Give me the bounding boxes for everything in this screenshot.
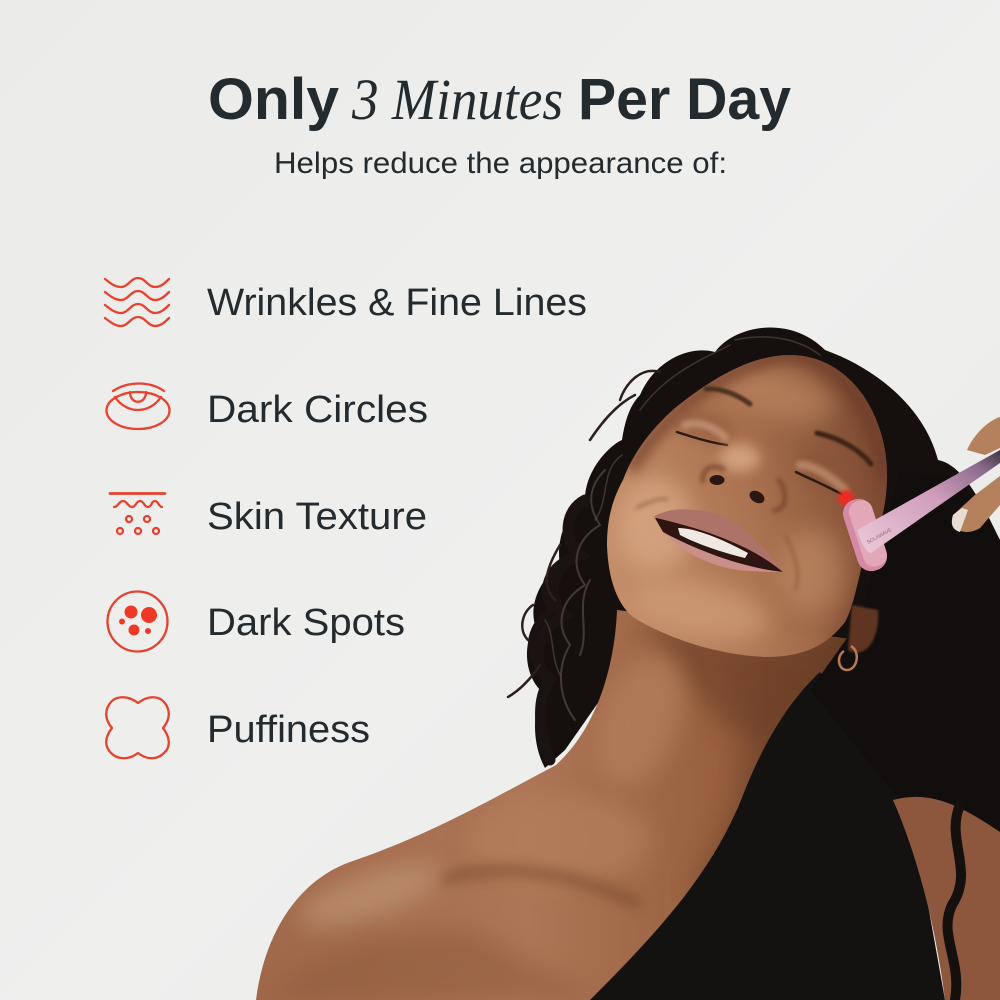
photo: woman using red light wand bbox=[250, 328, 1000, 1000]
eye socket shadow bbox=[679, 408, 734, 444]
red light glow bbox=[838, 490, 854, 506]
curl highlights bbox=[561, 470, 605, 720]
lower chest shade bbox=[298, 932, 564, 1000]
nose bbox=[703, 444, 785, 510]
smile crease bbox=[636, 499, 798, 590]
right hair bbox=[810, 470, 1000, 835]
icon: wrinkles bbox=[105, 278, 169, 326]
subtitle: Helps reduce the appearance of: bbox=[274, 147, 727, 180]
wand bbox=[839, 450, 1000, 575]
lower lip bbox=[662, 530, 783, 572]
title bbox=[208, 67, 791, 132]
shoulder highlight bbox=[299, 859, 442, 932]
title: Only bbox=[208, 67, 339, 132]
hanging curl on arm bbox=[948, 805, 961, 1000]
collarbone shading bbox=[440, 871, 640, 905]
right cheek tone bbox=[778, 528, 842, 612]
neck lit area bbox=[603, 650, 688, 781]
label: dark spots: Dark Spots bbox=[207, 602, 405, 644]
jaw shadow bbox=[830, 480, 885, 645]
left curls bbox=[508, 337, 820, 760]
label: skin texture: Skin Texture bbox=[207, 496, 427, 538]
cheek highlight bbox=[617, 477, 693, 573]
title: 3 Minutes bbox=[351, 67, 563, 132]
hand bbox=[952, 417, 1000, 532]
ear bbox=[848, 605, 878, 653]
title: Per Day bbox=[578, 67, 791, 132]
wand head bbox=[839, 495, 891, 575]
eye socket shadow right bbox=[788, 440, 862, 500]
forehead shadow at hairline bbox=[630, 355, 885, 480]
upper lip bbox=[653, 509, 783, 572]
wand handle bbox=[857, 450, 1000, 553]
black dress bbox=[590, 672, 945, 1000]
chest tone bbox=[564, 807, 646, 873]
body: neck, chest and shoulder bbox=[250, 600, 870, 1000]
arm bbox=[893, 797, 1000, 1000]
chin highlight bbox=[640, 578, 770, 645]
mouth interior bbox=[655, 518, 783, 572]
neck shadow under jaw bbox=[644, 626, 806, 734]
icon: skin texture bbox=[110, 494, 165, 534]
icon: puffiness bbox=[106, 697, 169, 758]
label: wrinkles: Wrinkles & Fine Lines bbox=[207, 282, 587, 324]
label: puffiness: Puffiness bbox=[207, 709, 370, 751]
label: dark circles: Dark Circles bbox=[207, 389, 428, 431]
teeth bbox=[678, 528, 748, 558]
face bbox=[600, 350, 895, 665]
wand head face bbox=[846, 497, 890, 569]
forehead highlight bbox=[734, 367, 838, 428]
back hair mass bbox=[527, 328, 1000, 840]
neck right shade bbox=[692, 742, 764, 884]
earring bbox=[839, 646, 857, 670]
left eye and brow bbox=[677, 389, 750, 445]
smile bbox=[653, 509, 783, 572]
icon: dark spots bbox=[108, 592, 168, 652]
list of benefits bbox=[105, 278, 587, 758]
wand text: SOLAWAVE bbox=[866, 527, 893, 546]
right eye and brow bbox=[796, 433, 871, 497]
icon: dark circles bbox=[106, 384, 170, 429]
